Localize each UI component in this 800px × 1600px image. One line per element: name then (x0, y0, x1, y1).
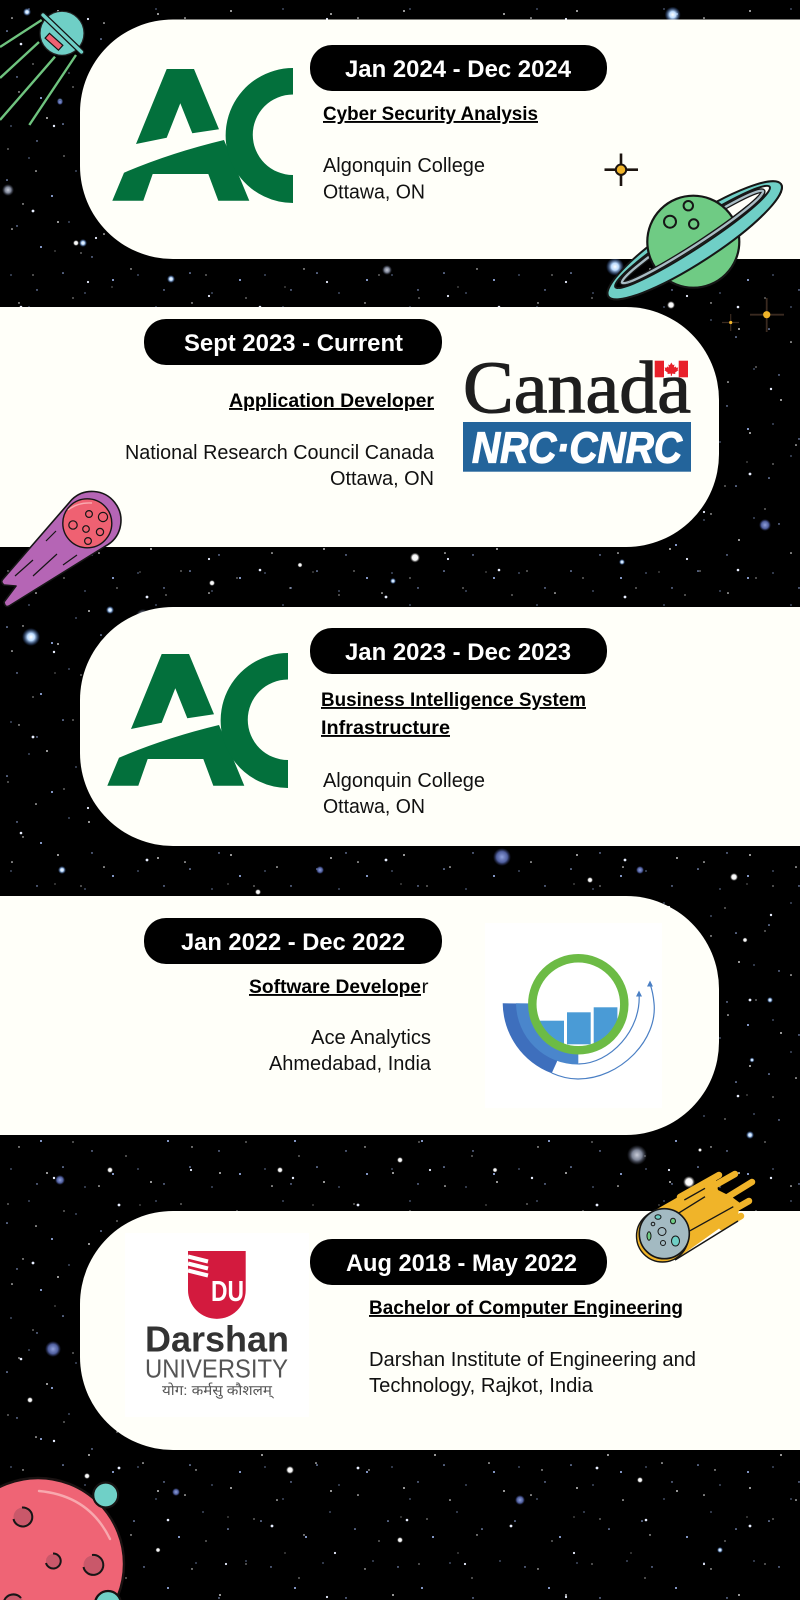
role title: Infrastructure (321, 718, 450, 739)
panel: Algonquin business intelligence (80, 607, 800, 846)
icon: yellow comet (636, 1174, 752, 1262)
role title: Application Developer (229, 391, 435, 412)
logo: Canada NRC-CNRC: NRC·CNRC (472, 424, 683, 473)
organisation and location: Technology, Rajkot, India (369, 1375, 594, 1397)
role title (321, 690, 586, 739)
logo: Algonquin College (107, 653, 288, 788)
icon: sparkle on card (604, 154, 638, 186)
icon: purple comet (2, 491, 121, 606)
icon: ringed planet (606, 180, 783, 300)
date pill: Jan 2023 - Dec 2023 (345, 639, 571, 666)
organisation and location: Ottawa, ON (323, 182, 425, 204)
organisation and location: Algonquin College (323, 770, 485, 792)
role title: r (422, 977, 429, 998)
logo: Ace Analytics (502, 954, 655, 1080)
logo: Algonquin College (112, 68, 293, 203)
date pill (310, 628, 607, 674)
logo: Darshan University: UNIVERSITY (145, 1354, 288, 1384)
icon: red planet with moons (0, 1478, 124, 1600)
organisation and location (369, 1349, 696, 1397)
role title: Cyber Security Analysis (323, 104, 538, 125)
panel: National Research Council (0, 307, 719, 547)
date pill (310, 1239, 607, 1285)
role title: Software Develope (249, 977, 421, 998)
logo: Canada NRC-CNRC (463, 348, 691, 473)
logo: Darshan University: DU (211, 1276, 244, 1308)
logo: Darshan University: योग: कर्मसु कौशलम् (162, 1382, 274, 1399)
organisation and location: Ottawa, ON (330, 468, 434, 490)
role title: Bachelor of Computer Engineering (369, 1298, 683, 1319)
panel: Ace Analytics (0, 896, 719, 1135)
organisation and location: Ace Analytics (311, 1027, 431, 1049)
organisation and location: Darshan Institute of Engineering and (369, 1349, 696, 1371)
organisation and location (323, 770, 485, 818)
organisation and location: Ottawa, ON (323, 796, 425, 818)
date pill (144, 319, 442, 365)
date pill: Aug 2018 - May 2022 (346, 1250, 577, 1277)
icon: sparkle stars on background (722, 298, 784, 332)
organisation and location (269, 1027, 432, 1075)
organisation and location: Algonquin College (323, 155, 485, 177)
date pill: Sept 2023 - Current (184, 330, 403, 357)
date pill (310, 45, 607, 91)
icon: satellite (0, 11, 84, 125)
organisation and location: National Research Council Canada (125, 442, 435, 464)
logo: Darshan University (125, 1233, 309, 1417)
date pill: Jan 2024 - Dec 2024 (345, 56, 572, 83)
organisation and location (125, 442, 435, 490)
organisation and location: Ahmedabad, India (269, 1053, 432, 1075)
logo: Darshan University: Darshan (145, 1319, 289, 1360)
panel: Algonquin cyber security (80, 20, 800, 259)
role title: Business Intelligence System (321, 690, 586, 711)
date pill (144, 918, 442, 964)
date pill: Jan 2022 - Dec 2022 (181, 929, 405, 956)
logo: Canada NRC-CNRC: Canada (463, 348, 691, 430)
organisation and location (323, 155, 485, 204)
panel: Darshan University (80, 1211, 800, 1450)
